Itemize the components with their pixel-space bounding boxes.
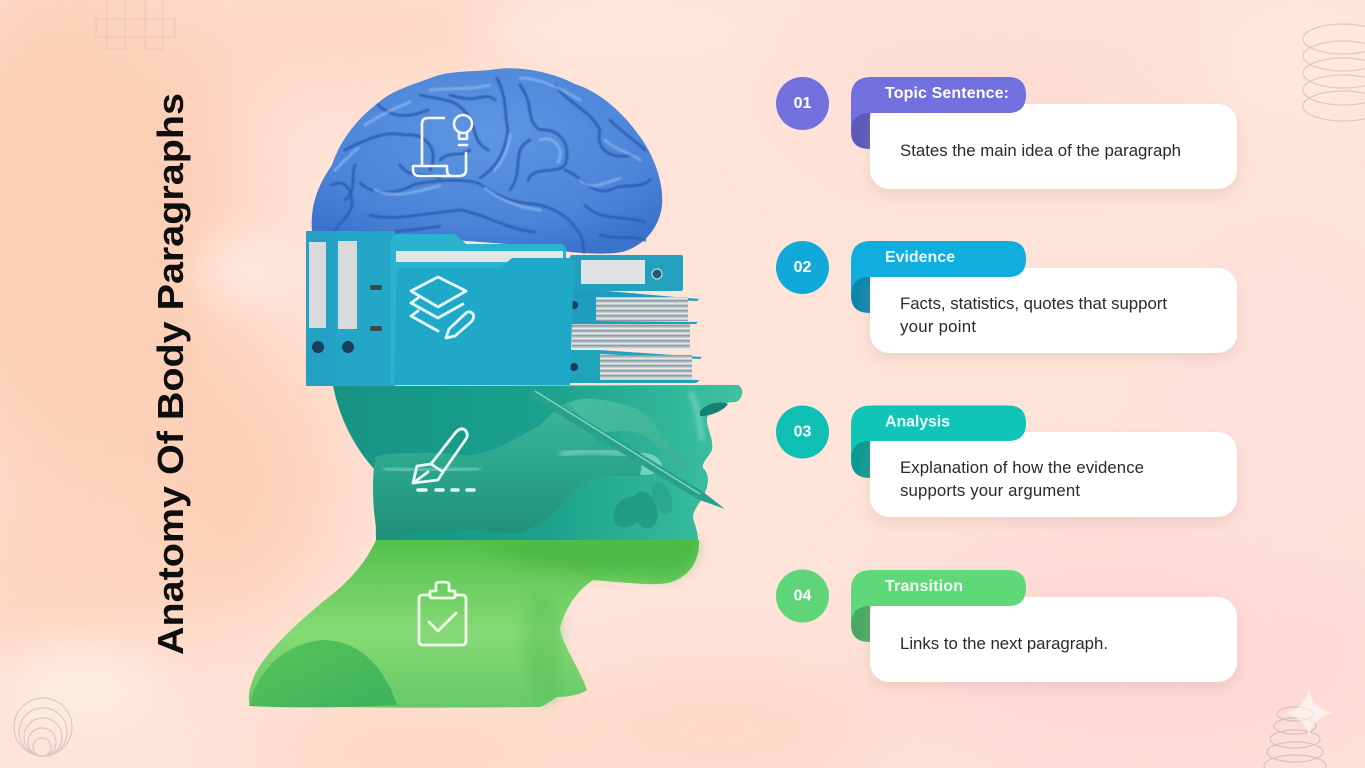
title: Anatomy Of Body Paragraphs — [150, 93, 191, 655]
badge 04: 04 — [794, 588, 812, 604]
icon: scroll with lightbulb — [413, 115, 472, 176]
card 04: Links to the next paragraph. — [900, 634, 1108, 653]
folder — [391, 234, 574, 385]
card 01: States the main idea of the paragraph — [900, 141, 1181, 160]
tab 04: Transition — [885, 578, 963, 595]
tab 02 — [851, 241, 1026, 296]
badge 01: 01 — [794, 95, 812, 112]
card 02: Facts, statistics, quotes that support — [900, 294, 1167, 313]
card 02: your point — [900, 317, 976, 336]
upright binders left — [306, 231, 395, 386]
head illustration — [249, 68, 742, 708]
tab 03 — [851, 406, 1026, 460]
pen — [529, 389, 725, 509]
tab 02: Evidence — [885, 249, 955, 266]
tab 03: Analysis — [885, 414, 950, 430]
card 03: Explanation of how the evidence — [900, 458, 1144, 477]
decorative coil and sparkle bottom right — [1264, 688, 1333, 768]
tab 01: Topic Sentence: — [885, 85, 1009, 102]
card 01 — [870, 104, 1237, 189]
badge 02: 02 — [794, 259, 812, 276]
icon: layers with pencil — [411, 277, 474, 338]
badge 03: 03 — [794, 424, 812, 440]
item 03: Analysis — [776, 406, 1237, 517]
decorative grid outline top left — [96, 0, 175, 49]
fold 01 — [851, 100, 870, 149]
decorative coil top right — [1303, 24, 1365, 121]
icon: clipboard with check — [419, 582, 466, 645]
green neck and shoulder — [249, 540, 699, 708]
tab 04 — [851, 570, 1026, 625]
item 04: Transition — [776, 570, 1237, 682]
card 03: supports your argument — [900, 481, 1080, 500]
icon: fountain pen with dashed line — [413, 429, 474, 490]
card 03 — [870, 432, 1237, 517]
card 04 — [870, 597, 1237, 682]
badge 01 — [776, 77, 829, 130]
item 01: Topic Sentence — [776, 77, 1237, 189]
decorative concentric circles bottom left — [14, 698, 72, 756]
item 02: Evidence — [776, 241, 1237, 353]
badge 02 — [776, 241, 829, 294]
fold 03 — [851, 428, 870, 478]
fold 02 — [851, 264, 870, 313]
brain — [312, 68, 662, 254]
hand holding pen — [373, 399, 690, 538]
teal face with nose and lips — [333, 385, 742, 540]
fold 04 — [851, 593, 870, 642]
card 02 — [870, 268, 1237, 353]
stacked binders right — [570, 255, 702, 383]
tab 01 — [851, 77, 1026, 132]
badge 04 — [776, 570, 829, 622]
badge 03 — [776, 406, 829, 458]
